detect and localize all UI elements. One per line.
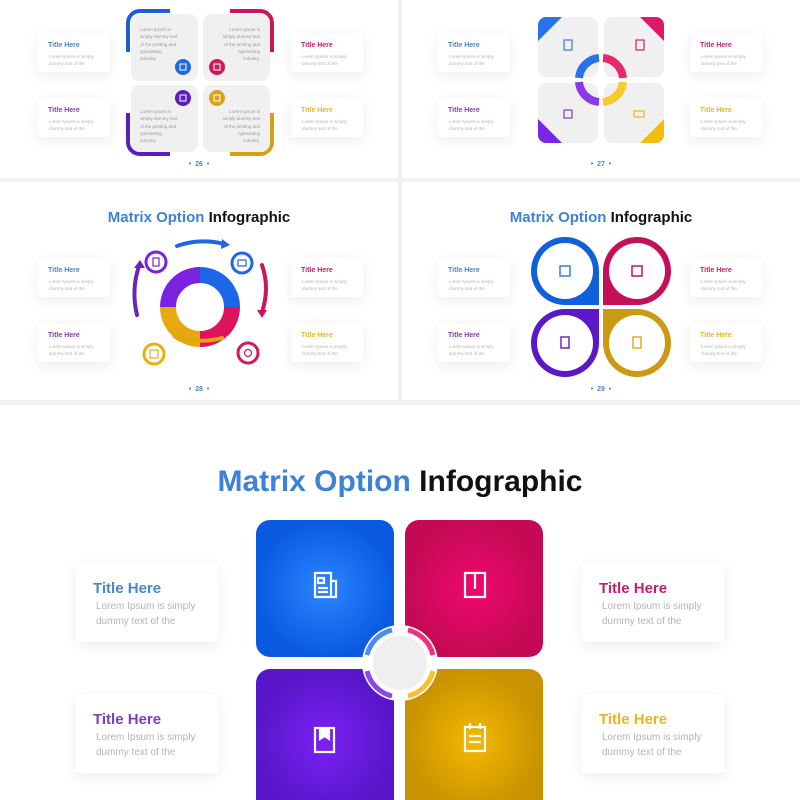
card: top-right [582,563,724,642]
card: top-right: Lorem Ipsum is simply dummy text of the [602,601,701,626]
card: bottom-right [291,323,363,362]
matrix tiles 26: typesetting [238,131,260,136]
card: top-left [76,563,218,642]
card: bottom-right: Title Here [301,107,333,114]
matrix tiles 26: typesetting [140,49,162,54]
card: top-right [690,258,762,297]
card: bottom-left: Lorem Ipsum is simply dummy text of the [49,119,94,131]
title 29: Matrix Option Infographic [510,209,692,226]
matrix tiles 26: Lorem Ipsum is [140,109,172,114]
card: top-right [291,33,363,72]
donut cycle diagram [132,239,268,366]
main title: Matrix Option Infographic [217,465,582,498]
card: bottom-left: Title Here [448,107,480,114]
card: top-right [291,258,363,297]
card: top-right [690,33,762,72]
card: bottom-left: Lorem Ipsum is simply dummy text of the [449,344,494,356]
card: bottom-left [438,98,510,137]
card: bottom-left: Title Here [448,332,480,339]
card: bottom-left: Lorem Ipsum is simply dummy text of the [96,732,195,758]
matrix tiles 26: industry. [243,138,260,143]
card: top-right: Lorem Ipsum is simply dummy text of the [302,279,347,291]
card: top-right: Title Here [301,42,333,49]
card: top-right: Title Here [301,267,333,274]
matrix tiles 26: industry. [140,138,157,143]
card: top-right: Title Here [700,42,732,49]
matrix tiles 26: simply dummy text [140,116,178,121]
card: bottom-left: Lorem Ipsum is simply dummy text of the [449,119,494,131]
page number 29: • 29 • [591,386,611,393]
card: top-left: Lorem Ipsum is simply dummy text of the [49,54,94,66]
card: bottom-right [291,98,363,137]
card: top-left [38,33,110,72]
card: top-left [438,258,510,297]
card: bottom-right: Title Here [301,332,333,339]
card: bottom-right: Lorem Ipsum is simply dummy text of the [602,732,701,758]
matrix tiles 26: simply dummy text [223,116,261,121]
card: top-left: Lorem Ipsum is simply dummy text of the [96,601,195,626]
card: top-right: Title Here [700,267,732,274]
circle matrix 29 [531,237,671,377]
card: top-left: Title Here [93,580,161,597]
card: bottom-right: Title Here [700,332,732,339]
card: top-left [438,33,510,72]
card: top-left: Lorem Ipsum is simply dummy text of the [449,279,494,291]
page number 28: • 28 • [189,386,209,393]
matrix tiles 26: industry. [140,56,157,61]
slide 28 [0,182,398,400]
main matrix [256,520,543,800]
matrix tiles 26: Lorem Ipsum is [229,109,261,114]
card: bottom-left [38,98,110,137]
card: bottom-left: Title Here [48,107,80,114]
card: top-left: Lorem Ipsum is simply dummy text of the [49,279,94,291]
card: bottom-right [582,694,724,773]
card: top-left: Title Here [448,42,480,49]
card: bottom-right: Title Here [700,107,732,114]
matrix tiles 26: of the printing and [140,124,177,129]
page number 27: • 27 • [591,161,611,168]
card: bottom-right: Lorem Ipsum is simply dummy text of the [302,119,347,131]
matrix tiles 26: typesetting [140,131,162,136]
card: bottom-left: Title Here [93,711,161,728]
card: top-left: Title Here [48,42,80,49]
card: top-left [38,258,110,297]
card: top-right: Lorem Ipsum is simply dummy text of the [302,54,347,66]
card: top-left: Title Here [48,267,80,274]
card: bottom-left: Title Here [48,332,80,339]
slide 26 [0,0,398,178]
matrix tiles 27 [538,17,664,143]
matrix tiles 26: Lorem Ipsum is [229,27,261,32]
matrix tiles 26: Lorem Ipsum is [140,27,172,32]
matrix tiles 26 [126,9,274,156]
main slide [0,405,800,800]
slide 27 [402,0,800,178]
matrix tiles 26: of the printing and [224,124,260,129]
page number 26: • 26 • [189,161,209,168]
matrix tiles 26: simply dummy text [223,34,261,39]
card: bottom-left [38,323,110,362]
card: bottom-right: Title Here [599,711,667,728]
card: bottom-left: Lorem Ipsum is simply dummy text of the [49,344,94,356]
card: top-right: Lorem Ipsum is simply dummy text of the [701,54,746,66]
card: bottom-right [690,98,762,137]
card: bottom-left [76,694,218,773]
card: bottom-right: Lorem Ipsum is simply dummy text of the [302,344,347,356]
card: top-left: Lorem Ipsum is simply dummy text of the [449,54,494,66]
matrix tiles 26: of the printing and [224,42,260,47]
card: bottom-right: Lorem Ipsum is simply dummy text of the [701,119,746,131]
card: top-right: Lorem Ipsum is simply dummy text of the [701,279,746,291]
card: top-left: Title Here [448,267,480,274]
matrix tiles 26: of the printing and [140,42,177,47]
matrix tiles 26: industry. [243,56,260,61]
card: top-right: Title Here [599,580,667,597]
matrix tiles 26: typesetting [238,49,260,54]
matrix tiles 26: simply dummy text [140,34,178,39]
slide 29 [402,182,800,400]
card: bottom-right: Lorem Ipsum is simply dummy text of the [701,344,746,356]
card: bottom-right [690,323,762,362]
card: bottom-left [438,323,510,362]
title 28: Matrix Option Infographic [108,209,290,226]
